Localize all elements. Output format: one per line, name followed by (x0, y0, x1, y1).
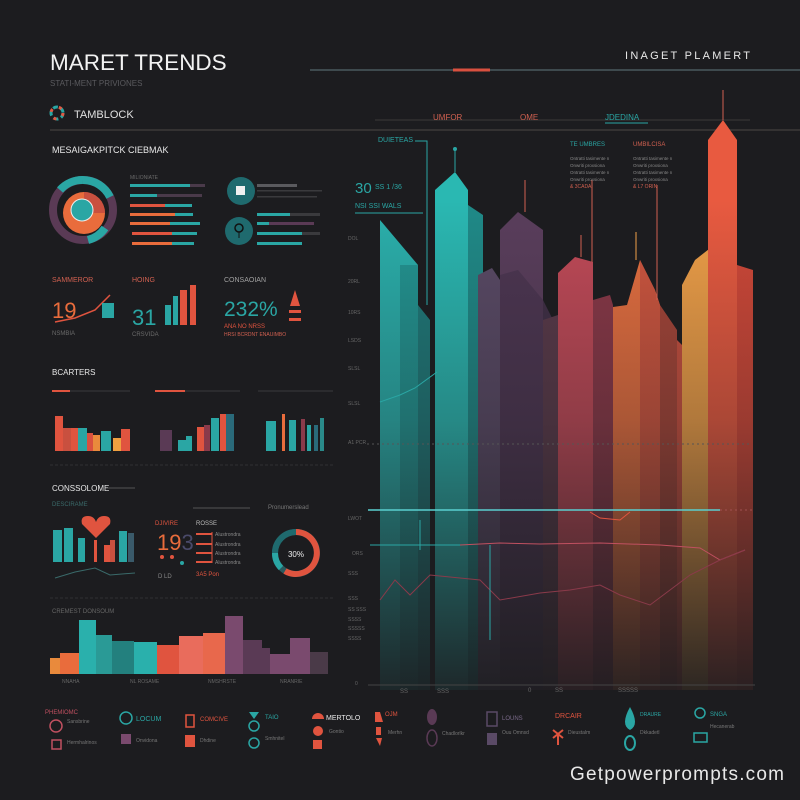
title (50, 50, 227, 88)
main chart: x-axis labels: SSS (437, 689, 449, 695)
main chart: y-axis labels: SSSS (348, 617, 362, 623)
stat: 193 (155, 521, 194, 580)
main chart: y-axis labels: 20RL (348, 279, 360, 285)
main chart: x-axis labels: SSSSS (618, 688, 638, 694)
main chart: skyline columns: JDEDINA (605, 113, 640, 122)
stat: 193: 193 (157, 530, 194, 555)
main chart: annotation texts: Onwriti proxsiona (633, 163, 668, 168)
list beside 193: 3A5 Pon (196, 572, 219, 578)
bottom icon row: Dieustalm (568, 730, 590, 736)
header right label: INAGET PLAMERT (625, 50, 750, 62)
main chart: annotation texts: Ontratti tasimente n (570, 156, 610, 161)
main chart: annotation texts: Ontratti tasimente n (633, 170, 673, 175)
watermark: Getpowerprompts.com (570, 764, 784, 785)
main chart: skyline columns: OME (520, 113, 538, 122)
main chart: y-axis labels: SSSS (348, 636, 362, 642)
stat: 31: HOING (132, 277, 155, 284)
bottom icon row (45, 707, 735, 750)
bottom icon row: DRCAIR (555, 713, 582, 720)
bottom icon row: Ouu Omnsd (502, 730, 529, 736)
stat: 232%: CONSAOIAN (224, 277, 266, 284)
main chart: y-axis labels: SLSL (348, 401, 360, 407)
main chart: annotation texts: Onwriti proxsiona (633, 177, 668, 182)
bottom-left bar chart: NL ROSAME (130, 679, 160, 685)
stat: 31: CRSVIDA (132, 332, 159, 338)
stat: 232%: 232% (224, 298, 278, 321)
bar chart 1 (52, 391, 130, 451)
bottom icon row: Dhdine (200, 738, 216, 744)
main chart: annotation left (355, 137, 427, 305)
bottom icon row: SNGA (710, 712, 727, 718)
bottom icon row: LOUNS (502, 716, 523, 722)
bottom-left bar chart (50, 609, 328, 685)
main chart: y-axis labels: DOL (348, 236, 358, 242)
main chart: y-axis labels: 10RS (348, 310, 361, 316)
stat: 193: DJIVIRE (155, 521, 178, 527)
main chart: y-axis labels: ORS (352, 551, 364, 557)
list beside 193: Alustrondra (215, 542, 241, 548)
main chart: y-axis labels: SLSL (348, 366, 360, 372)
bottom icon row: MERTOLO (326, 715, 361, 722)
main chart: annotation texts: & L7 ORIN (633, 184, 658, 190)
main chart: skyline columns: UMFOR (433, 113, 463, 122)
main chart: annotation texts: & 3CADA (570, 184, 592, 190)
chart with heart (53, 516, 135, 578)
stat: 232%: HRSI BCRDNT ENAUIMBO (224, 332, 286, 338)
main chart: y-axis labels: A1 PCR (348, 440, 366, 446)
main chart: annotation texts: Ontratti tasimente n (570, 170, 610, 175)
bottom icon row: Hermhalrinos (67, 740, 97, 746)
bottom icon row: Dkkadetl (640, 730, 659, 736)
stat: 19: 19 (52, 298, 76, 323)
stat: 232% (224, 277, 301, 338)
main chart: y-axis labels: 0 (355, 681, 358, 687)
main chart: skyline columns (375, 90, 755, 690)
main chart: y-axis labels: SSS (348, 596, 359, 602)
heading: conssolome: CONSSOLOME (52, 484, 109, 493)
list beside 193: ROSSE (196, 521, 217, 527)
list beside 193: Alustrondra (215, 560, 241, 566)
bottom-left bar chart: CREMEST DONSOUM (52, 609, 114, 615)
bottom-left bar chart: NRANRIE (280, 679, 303, 685)
main chart: annotation left: DUIETEAS (378, 137, 413, 144)
icon: circle badge 1 (227, 177, 255, 205)
list beside 193: Alustrondra (215, 551, 241, 557)
bottom icon row: Smhnitel (265, 736, 284, 742)
bars beside badges (257, 184, 322, 245)
section heading: tamblock: TAMBLOCK (74, 109, 134, 121)
bottom icon row: LOCUM (136, 716, 161, 723)
main chart: annotation texts: Ontratti tasimente n (633, 156, 673, 161)
main chart: annotation texts: TE UMBRES (570, 142, 605, 148)
bottom icon row: TAIO (265, 715, 279, 721)
bottom icon row: OJM (385, 712, 398, 718)
main chart: x-axis labels: SS (555, 688, 563, 694)
heading: conssolome: Pronumerslead (268, 505, 309, 511)
main chart: annotation texts: Onwriti proxsiona (570, 163, 605, 168)
bottom icon row: Chadlorlkr (442, 731, 465, 737)
bar chart 3 (258, 391, 333, 451)
stat: 19 (52, 277, 114, 337)
bottom icon row: Merhn (388, 730, 402, 736)
main chart: annotation texts (570, 142, 673, 190)
title: MARET TRENDS (50, 50, 227, 75)
stat: 193: D LD (158, 574, 172, 580)
icon: circle badge 2 (225, 217, 253, 245)
bottom-left bar chart: NMSHRSTE (208, 679, 237, 685)
main chart: y-axis labels: LWOT (348, 516, 362, 522)
main chart: y-axis labels: LSDS (348, 338, 362, 344)
heading: conssolome (52, 484, 309, 511)
donut chart (53, 180, 113, 240)
main chart: annotation texts: UMBILCISA (633, 142, 665, 148)
bottom icon row: DRAURE (640, 712, 662, 718)
main chart: y-axis labels: SSS (348, 571, 359, 577)
bottom icon row: Sansbrine (67, 719, 90, 725)
heading: bcarters: BCARTERS (52, 368, 95, 377)
title: STATI-MENT PRIVIONES (50, 79, 142, 88)
list beside 193: Alustrondra (215, 532, 241, 538)
bar chart 2 (155, 391, 240, 451)
main chart: y-axis labels (348, 236, 367, 687)
main chart: annotation texts: Onwriti proxsiona (570, 177, 605, 182)
stat: 31 (132, 277, 196, 338)
bottom icon row: Hecanerab (710, 724, 735, 730)
icon: tamblock (51, 107, 63, 119)
stat: 19: SAMMEROR (52, 277, 93, 284)
main chart: annotation left: 30 (355, 180, 372, 197)
bottom icon row: PHEMIOMC (45, 710, 79, 716)
stat: 31: 31 (132, 305, 156, 330)
stat: 19: NSMBIA (52, 331, 75, 337)
list beside 193 (196, 521, 241, 578)
donut: 30%: 30% (288, 550, 304, 559)
main chart: annotation left: SS 1 /36 (375, 184, 402, 191)
stat: 232%: ANA NO NRSS (224, 324, 265, 330)
main chart: y-axis labels: SSSSS (348, 626, 365, 632)
main chart: line series (367, 372, 755, 685)
main chart: x-axis labels: 0 (528, 688, 532, 694)
horizontal bar list (130, 175, 205, 245)
main chart: x-axis labels (400, 688, 638, 695)
main chart: y-axis labels: SS SSS (348, 607, 367, 613)
bottom-left bar chart: NNAHA (62, 679, 80, 685)
bottom icon row: Gontio (329, 729, 344, 735)
main chart: annotation left: NSI SSI WALS (355, 203, 402, 210)
bottom icon row: COMCIVE (200, 717, 228, 723)
main chart: x-axis labels: SS (400, 689, 408, 695)
heading: conssolome: DESCIRAME (52, 502, 88, 508)
horizontal bar list: MILIONIATE (130, 175, 159, 181)
heading: left panel: MESAIGAKPITCK CIEBMAK (52, 145, 169, 155)
donut: 30% (275, 532, 317, 574)
bottom icon row: Onvidona (136, 738, 158, 744)
